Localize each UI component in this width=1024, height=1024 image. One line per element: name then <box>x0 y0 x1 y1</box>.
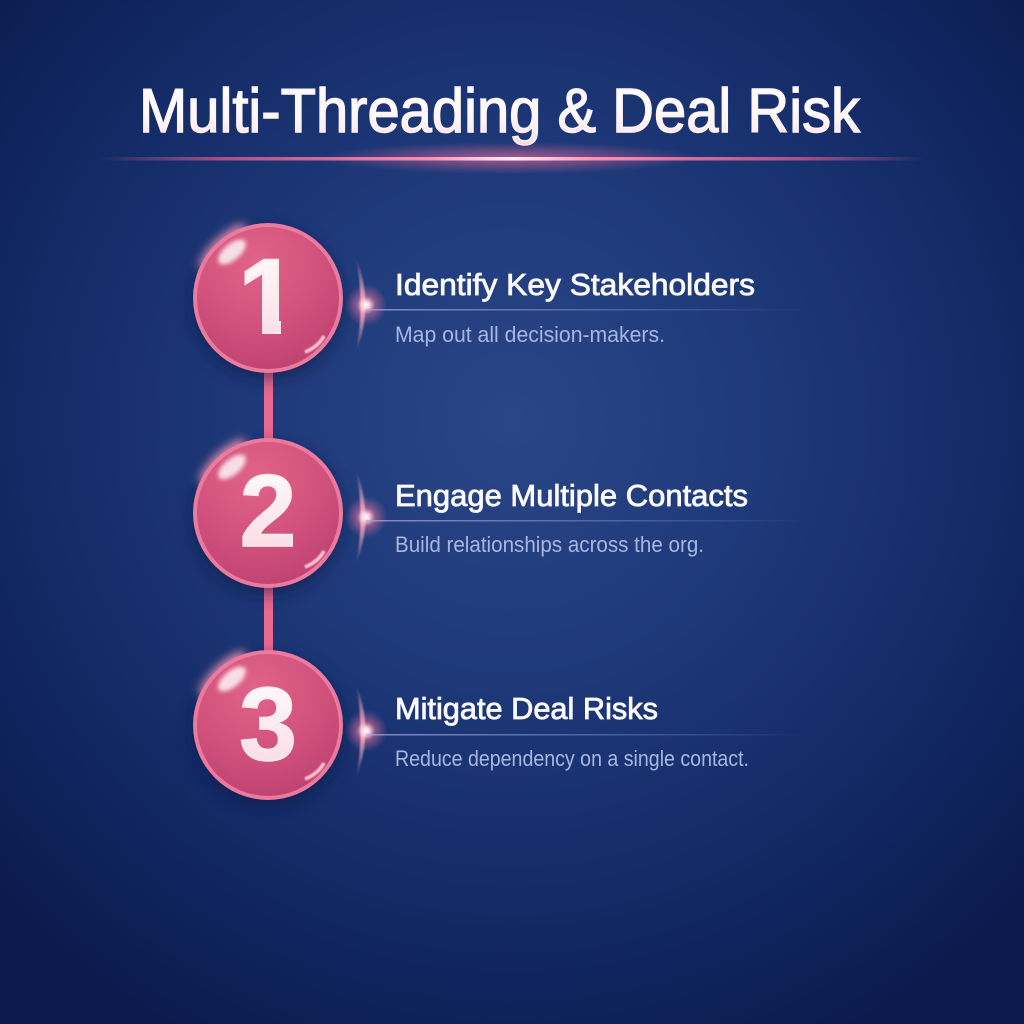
sparkle <box>345 470 387 564</box>
description: Map out all decision-makers. <box>395 322 665 347</box>
badge: number 1: 1 <box>239 238 297 356</box>
title underline glow <box>100 142 924 174</box>
heading: Mitigate Deal Risks <box>395 691 658 726</box>
badge: number 3 <box>193 650 343 806</box>
divider <box>366 309 806 310</box>
description: Reduce dependency on a single contact. <box>395 746 749 771</box>
badge: number 2: 2 <box>240 454 296 568</box>
badge: number 3: 3 <box>239 667 297 783</box>
badge: number 2 <box>193 438 343 594</box>
sparkle <box>345 258 387 352</box>
description: Build relationships across the org. <box>395 532 704 557</box>
divider <box>366 520 806 522</box>
divider <box>366 734 806 736</box>
heading: Engage Multiple Contacts <box>395 478 748 513</box>
sparkle <box>345 684 387 778</box>
step 2 <box>193 438 806 594</box>
step 1 <box>193 223 806 379</box>
heading: Identify Key Stakeholders <box>395 267 755 302</box>
title: Multi-Threading & Deal Risk <box>139 77 861 146</box>
connector: step 2 to 3 <box>264 584 273 656</box>
step 3 <box>193 650 806 806</box>
connector: step 1 to 2 <box>264 368 273 444</box>
badge: number 1 <box>193 223 343 379</box>
